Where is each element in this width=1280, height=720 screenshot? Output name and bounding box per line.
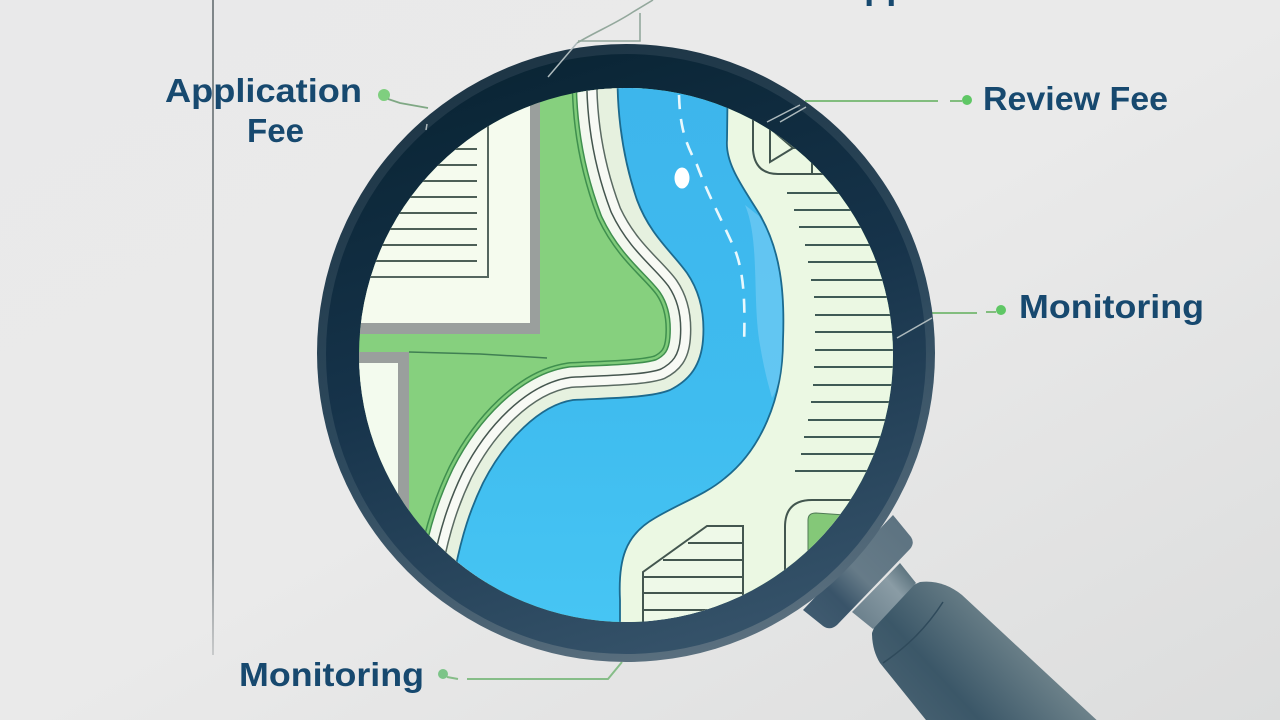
label: Review Fee: Review Fee bbox=[983, 80, 1168, 117]
ring scratch marks bbox=[426, 43, 932, 338]
pale land right of river bbox=[620, 108, 893, 622]
connector: Application Fee bbox=[378, 89, 428, 108]
connector: Monitoring (right) bbox=[930, 305, 1006, 315]
lens map bbox=[359, 88, 893, 622]
parcel: bottom hatched bbox=[642, 525, 744, 622]
river bbox=[456, 88, 784, 622]
magnifier ring bbox=[317, 44, 935, 662]
label: Application Fee: Fee bbox=[247, 112, 304, 149]
connector: Monitoring (bottom) bbox=[438, 662, 622, 679]
magnifying glass handle bbox=[803, 515, 1102, 720]
river glint bbox=[674, 168, 690, 188]
handle grip bbox=[872, 582, 1102, 720]
connector: top callout line bbox=[577, 0, 653, 43]
label: Application Fee bbox=[165, 72, 362, 149]
label: Monitoring (bottom): Monitoring bbox=[239, 656, 424, 693]
label: Application Fee: Application bbox=[165, 72, 362, 109]
handle neck bbox=[852, 563, 916, 629]
building: top right bbox=[752, 120, 823, 175]
green land bbox=[350, 80, 910, 640]
vertical axis line bbox=[212, 0, 214, 655]
parcel: lower left bbox=[359, 351, 547, 510]
label: Monitoring (right): Monitoring bbox=[1019, 288, 1204, 325]
building: bottom right bbox=[785, 500, 860, 570]
hatching: right parcel bbox=[787, 193, 900, 471]
parcel: upper left bbox=[360, 102, 540, 334]
river banks bbox=[445, 60, 703, 640]
river center dashes bbox=[679, 95, 744, 345]
handle collar bbox=[803, 515, 913, 628]
river highlight bbox=[745, 205, 782, 398]
connector: Review Fee bbox=[805, 95, 972, 105]
